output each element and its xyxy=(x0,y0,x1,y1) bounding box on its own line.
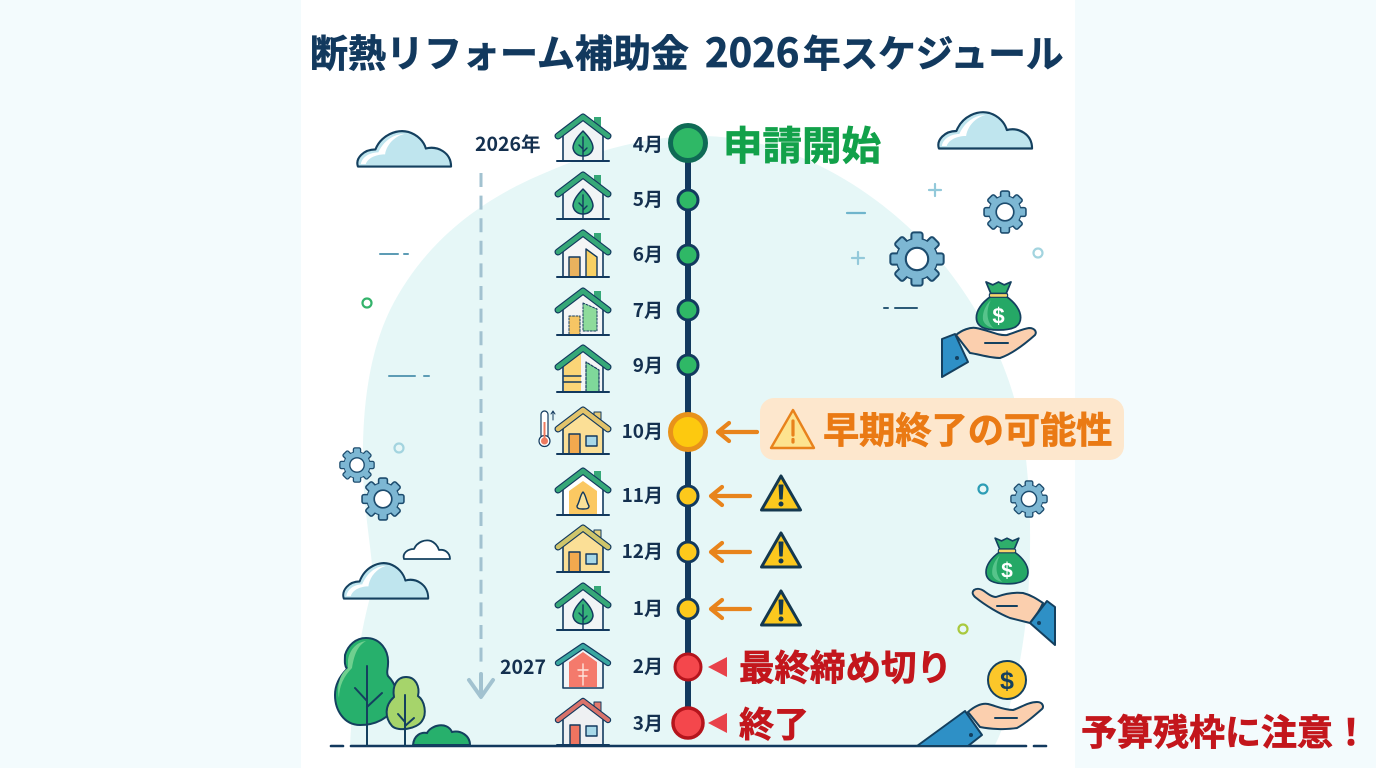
house: May xyxy=(557,175,609,219)
warning rows xyxy=(711,476,800,625)
ground line xyxy=(331,745,1046,747)
icon: hand with money bag, upper xyxy=(942,282,1036,377)
callout text: 早期終了の可能性 xyxy=(823,410,1112,451)
month labels: 9月 xyxy=(633,351,663,378)
month labels: 7月 xyxy=(633,296,663,323)
year labels: 2026年 xyxy=(475,128,541,157)
decoration: rings, plus marks and dashes xyxy=(362,184,1042,634)
month labels: 11月 xyxy=(622,481,663,508)
house: December xyxy=(557,528,609,572)
title: 2026 xyxy=(705,21,799,79)
house: November xyxy=(557,471,609,515)
title: 年スケジュール xyxy=(803,33,1063,75)
house: February xyxy=(558,646,608,688)
month labels: 4月 xyxy=(633,130,663,157)
year labels: 2027 xyxy=(500,651,546,680)
timeline nodes xyxy=(670,126,706,738)
month labels: 3月 xyxy=(633,709,663,736)
month labels: 10月 xyxy=(622,417,663,444)
callout pill xyxy=(760,398,1124,460)
icon: hand with coin, lower: $ xyxy=(1000,667,1014,695)
callout warning mark xyxy=(791,421,795,442)
house: April xyxy=(557,117,609,161)
bush xyxy=(413,725,470,745)
month labels xyxy=(622,130,663,736)
month labels: 2月 xyxy=(633,652,663,679)
decoration: gears xyxy=(340,191,1047,520)
final deadline label: 最終締め切り xyxy=(739,648,952,688)
decoration: clouds xyxy=(343,112,1032,599)
house: October with thermometer xyxy=(539,410,609,454)
month labels: 5月 xyxy=(633,185,663,212)
start label: 申請開始 xyxy=(723,125,882,169)
month labels: 1月 xyxy=(633,594,663,621)
callout warning icon xyxy=(771,410,814,448)
deadline markers xyxy=(708,657,727,733)
center white panel xyxy=(301,0,1075,768)
year labels xyxy=(475,128,546,680)
house: June xyxy=(557,233,609,277)
month labels: 6月 xyxy=(633,240,663,267)
icon: hand with money bag, middle xyxy=(973,538,1055,645)
month labels: 12月 xyxy=(622,537,663,564)
date direction arrow xyxy=(469,173,493,697)
icon: hand with coin, lower xyxy=(917,661,1043,746)
callout: early termination xyxy=(718,398,1124,460)
callout arrow xyxy=(718,423,757,441)
house: September xyxy=(557,348,609,392)
title: 断熱リフォーム補助金 xyxy=(310,34,689,76)
big tree xyxy=(335,638,397,746)
house: July xyxy=(557,291,609,335)
pale teal background blob xyxy=(350,136,1030,745)
timeline line xyxy=(685,143,691,725)
end label: 終了 xyxy=(739,706,809,745)
house: March xyxy=(557,701,609,745)
houses xyxy=(539,117,609,745)
budget notice: 予算残枠に注意！ xyxy=(1081,712,1369,753)
small tree xyxy=(387,677,425,746)
house: January xyxy=(557,586,609,630)
trees and bush xyxy=(335,638,470,746)
